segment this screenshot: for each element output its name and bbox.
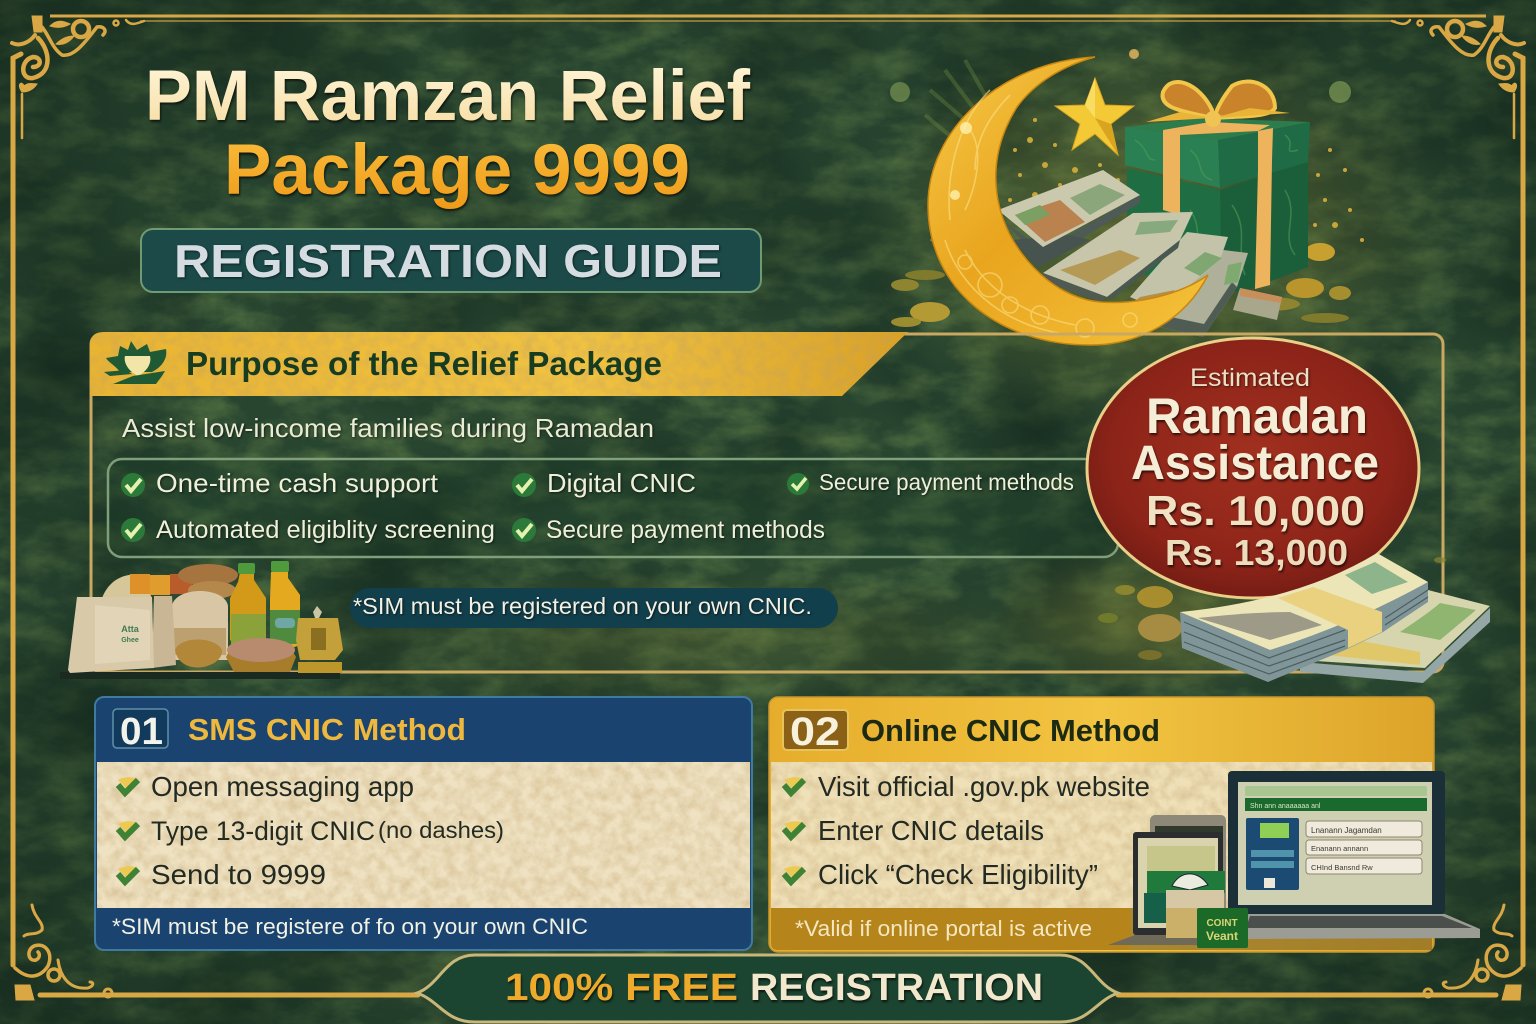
title: Package 9999: [224, 131, 690, 210]
laptop: CHInd Bansnd Rw: [1311, 863, 1373, 872]
laptop: Enanann annann: [1311, 844, 1368, 853]
title: [145, 57, 750, 210]
red badge: estimated ramadan assistance: Rs. 10,000: [1146, 487, 1365, 534]
panel: purpose of the relief package: [90, 332, 1443, 672]
SIM note pill: *SIM must be registered on your own CNIC.: [353, 593, 812, 619]
stack D: [1160, 250, 1248, 337]
coins near cash bundle: [1098, 557, 1446, 660]
subtitle badge: registration guide: [141, 229, 761, 292]
groceries illustration: Ghee: [121, 637, 139, 644]
number badge 02: [783, 710, 848, 754]
panel: 02 online CNIC method: [769, 697, 1434, 952]
step: type CNIC: (no dashes): [378, 817, 504, 843]
crescent moon: [928, 57, 1208, 345]
cream content area: [771, 762, 1432, 908]
step: open messaging app: Open messaging app: [151, 771, 414, 802]
SIM note pill: [350, 588, 838, 628]
gift box with bow: [1125, 82, 1310, 295]
feature list box: [108, 459, 1118, 557]
cream content area: [97, 762, 750, 908]
money stacks beside crescent: [998, 170, 1282, 337]
panel: 01 SMS CNIC method: [95, 697, 752, 950]
stack A: [1000, 195, 1140, 262]
stack C: [1130, 232, 1228, 310]
green card: Veant: [1206, 929, 1238, 943]
number badge 02: 02: [790, 710, 840, 754]
red badge: estimated ramadan assistance: Assistance: [1131, 437, 1379, 490]
step: enter CNIC: Enter CNIC details: [818, 815, 1044, 846]
number badge 01: 01: [120, 711, 163, 753]
item: one-time cash support: One-time cash support: [156, 468, 439, 498]
intro text: Assist low-income families during Ramadan: [122, 413, 654, 443]
step: type CNIC: Type 13-digit CNIC: [151, 816, 375, 846]
upper stack: [1180, 582, 1428, 682]
red badge: estimated ramadan assistance: Estimated: [1190, 364, 1310, 392]
red badge: estimated ramadan assistance: Rs. 13,000: [1165, 532, 1348, 573]
footer banner: 100% free registration: 100% FREE: [505, 967, 738, 1009]
item: secure payment methods: Secure payment methods: [819, 469, 1074, 495]
heading: Online CNIC Method: [861, 713, 1160, 748]
red badge: estimated ramadan assistance: Ramadan: [1146, 388, 1368, 444]
laptop: Lnanann Jagamdan: [1311, 826, 1382, 835]
star: [1055, 78, 1134, 155]
devices illustration: phone, tablet, laptop: [1108, 771, 1480, 948]
step: type CNIC: [118, 816, 504, 846]
heading: SMS CNIC Method: [188, 712, 466, 747]
groceries illustration: [60, 561, 343, 679]
stack B: [1043, 212, 1193, 297]
step: visit website: Visit official .gov.pk website: [818, 771, 1150, 802]
item: digital CNIC: Digital CNIC: [547, 468, 696, 498]
gold dust and coins around crescent: [890, 49, 1364, 327]
laptop: Shn ann anaaaaaa anl: [1250, 803, 1321, 810]
red badge: estimated ramadan assistance: [1087, 338, 1419, 598]
title: PM Ramzan Relief: [145, 57, 750, 136]
step: send to 9999: Send to 9999: [151, 859, 326, 890]
subtitle badge: registration guide: REGISTRATION GUIDE: [174, 235, 722, 287]
green card: [1197, 908, 1248, 948]
item: automated eligibility screening: Automated eligiblity screening: [156, 516, 495, 544]
laptop: [1228, 771, 1480, 939]
icon: lotus and book emblem: [104, 341, 166, 384]
item: secure payment methods second: Secure payment methods: [546, 516, 825, 544]
small note roll: [1233, 288, 1282, 320]
green card: COINT: [1206, 918, 1238, 929]
footer banner: 100% free registration: REGISTRATION: [750, 967, 1043, 1009]
footer banner: 100% free registration: [417, 955, 1118, 1022]
groceries illustration: Atta: [121, 624, 140, 634]
step: check eligibility: Click “Check Eligibility”: [818, 859, 1098, 890]
tablet: [1108, 832, 1225, 945]
phone: [1150, 815, 1226, 915]
footer strip: [771, 908, 1130, 950]
cash bundle illustration: [1180, 553, 1490, 683]
header banner: [90, 332, 908, 396]
footer note: *Valid if online portal is active: [795, 916, 1092, 941]
lower stack: [1300, 608, 1490, 683]
header banner: Purpose of the Relief Package: [186, 345, 662, 382]
footer note: *SIM must be registere of fo on your own CNIC: [112, 914, 588, 939]
